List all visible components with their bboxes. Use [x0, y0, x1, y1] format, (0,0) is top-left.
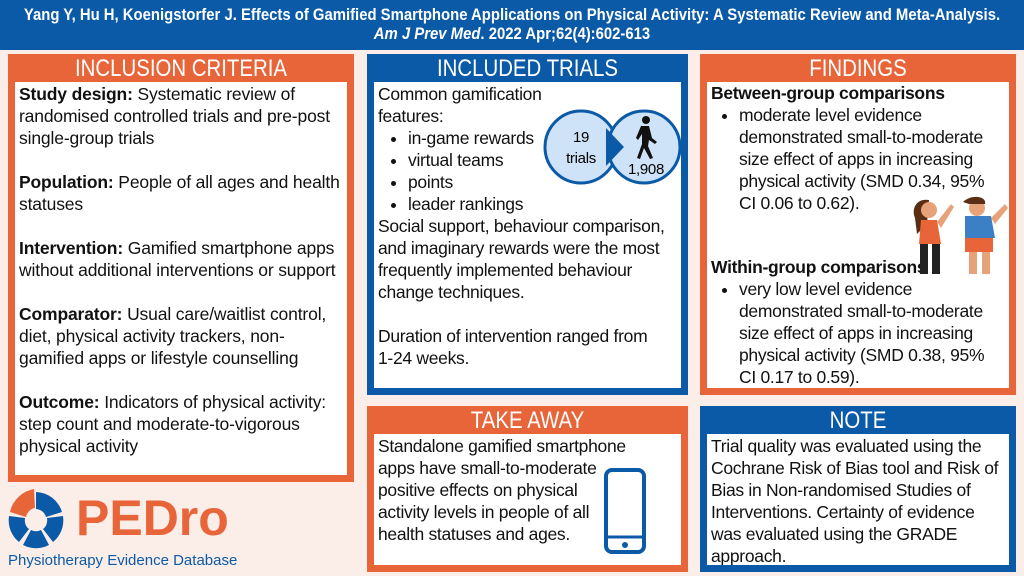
panel: findings	[700, 54, 1016, 395]
panel: included trials: features: Social support, behaviour comparison, and imaginary rewards were the most frequently implemented behaviour change techniques.	[378, 106, 665, 302]
panel: included trials: 1-24 weeks.	[378, 348, 469, 368]
panel: inclusion criteria: Study design: Systematic review of randomised controlled trials and pre-post single-group trials	[19, 84, 330, 148]
panel: inclusion criteria: Comparator: Usual care/waitlist control, diet, physical activity trackers, non-gamified apps or lifestyle counselling	[19, 304, 326, 368]
panel: included trials: Common gamification	[378, 84, 542, 104]
illustration: people stretching	[914, 196, 1008, 274]
icon: trials and participants circles: 1,908	[628, 161, 664, 178]
header citation	[0, 0, 1024, 50]
panel: inclusion criteria	[8, 54, 354, 482]
logo: PEDro	[8, 489, 237, 569]
header citation: Yang Y, Hu H, Koenigstorfer J. Effects of Gamified Smartphone Applications on Physical Activity: A Systematic Review and Meta-Analysis.	[24, 5, 1000, 24]
panel: included trials: leader rankings	[408, 194, 523, 214]
panel: included trials: in-game rewards	[408, 128, 534, 148]
panel: included trials: Duration of intervention ranged from	[378, 326, 647, 346]
panel: included trials: virtual teams	[408, 150, 503, 170]
panel: included trials: INCLUDED TRIALS	[437, 55, 618, 82]
panel: included trials	[367, 54, 688, 395]
logo: PEDro: Physiotherapy Evidence Database	[8, 552, 237, 569]
icon: trials and participants circles: 19	[573, 129, 589, 146]
panel: take away	[367, 406, 688, 572]
panel: findings: FINDINGS	[809, 55, 907, 82]
header citation: Am J Prev Med. 2022 Apr;62(4):602-613	[374, 24, 650, 43]
icon: trials and participants circles: trials	[566, 150, 596, 167]
panel: inclusion criteria: Population: People of all ages and health statuses	[19, 172, 340, 214]
panel: findings: moderate level evidence demonstrated small-to-moderate size effect of apps in increasing physical activity (SMD 0.34, 95% CI 0.06 to 0.62).	[739, 105, 984, 213]
panel: inclusion criteria: Outcome: Indicators of physical activity: step count and moderate-to-vigorous physical activity	[19, 392, 326, 456]
panel: findings: Between-group comparisons Within-group comparisons	[711, 83, 945, 277]
panel: findings: very low level evidence demonstrated small-to-moderate size effect of apps in increasing physical activity (SMD 0.38, 95% CI 0.17 to 0.59).	[739, 279, 984, 387]
icon: smartphone	[604, 468, 646, 554]
panel: inclusion criteria: INCLUSION CRITERIA	[75, 55, 287, 82]
panel: note: NOTE	[830, 407, 886, 434]
panel: inclusion criteria: Intervention: Gamified smartphone apps without additional interventions or support	[19, 238, 336, 280]
panel: included trials: points	[408, 172, 453, 192]
icon: trials and participants circles	[544, 110, 681, 184]
logo: PEDro: PEDro	[76, 490, 229, 546]
panel: take away: TAKE AWAY	[471, 407, 584, 434]
panel: take away: Standalone gamified smartphone apps have small-to-moderate positive effects on physical activity levels in people of all health statuses and ages.	[378, 436, 626, 544]
panel: note: Trial quality was evaluated using the Cochrane Risk of Bias tool and Risk of Bias in Non-randomised Studies of Interventions. Certainty of evidence was evaluated using the GRADE approach.	[711, 436, 998, 565]
